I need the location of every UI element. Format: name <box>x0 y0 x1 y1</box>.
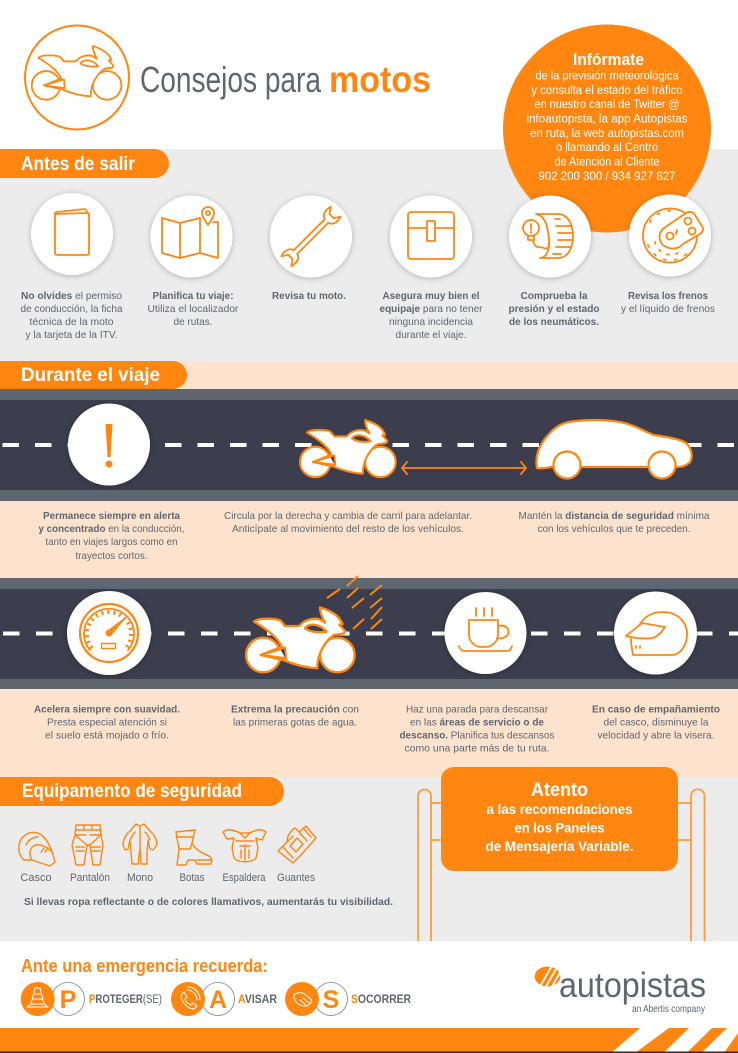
text: carril: Circula por la derecha y cambia de carril para adelantar. <box>224 510 472 522</box>
text: distancia <box>518 510 710 535</box>
sign: Paneles de Mensajería Variable: Atento <box>531 780 588 801</box>
panel: documentos: de conducción, la ficha <box>20 303 123 315</box>
text: alerta: trayectos cortos. <box>76 550 148 562</box>
text: empañamiento: En caso de empañamiento <box>592 704 720 716</box>
text: alerta: y concentrado en la conducción, <box>38 523 184 535</box>
icon: botas <box>176 830 212 865</box>
panel: equipaje: ninguna incidencia <box>389 316 473 328</box>
heading: Durante el viaje: Durante el viaje <box>21 365 160 386</box>
heading: Antes de salir: Antes de salir <box>21 154 136 175</box>
icon: brake disc <box>643 208 703 262</box>
title: motos <box>329 59 431 100</box>
text: precaución: las primeras gotas de agua. <box>233 716 357 728</box>
text: distancia: Mantén la distancia de seguridad mínima <box>518 510 710 522</box>
panel: documentos: técnica de la moto <box>30 316 114 328</box>
panel: frenos: y el líquido de frenos <box>621 303 715 315</box>
text: visibility tip: Si llevas ropa reflectante o de colores llamativos, aumentarás tu visibilidad. <box>24 896 393 908</box>
icon: tyre gauge <box>523 214 573 258</box>
text: alerta <box>38 510 184 562</box>
text: acelera: Acelera siempre con suavidad. <box>34 704 180 716</box>
icon: pantalón <box>72 825 103 865</box>
panel: revisa moto <box>270 196 352 302</box>
callout: Infórmate: de la previsión meteorológica <box>536 70 679 82</box>
sign: Paneles de Mensajería Variable: de Mensajería Variable. <box>486 838 634 854</box>
heading: Equipamento de seguridad: Equipamento de seguridad <box>22 781 242 802</box>
panel: revisa moto: Revisa tu moto. <box>272 290 346 302</box>
icon: motorcycle in rain <box>246 607 355 672</box>
step: avisar <box>171 982 278 1016</box>
road: second <box>0 578 738 689</box>
text: Espaldera: Espaldera <box>222 872 266 884</box>
callout: Infórmate: o llamando al Centro <box>556 142 658 154</box>
text: acelera: Presta especial atención si <box>47 716 167 728</box>
logo: autopistas: autopistas <box>559 966 706 1005</box>
panel: frenos: Revisa los frenos <box>628 290 708 302</box>
panel: neumáticos <box>508 196 600 328</box>
panel: planifica: Planifica tu viaje: <box>152 290 234 302</box>
title: Consejos para <box>140 59 322 100</box>
step: proteger: P <box>60 986 76 1014</box>
text: empañamiento <box>592 704 720 742</box>
heading: emergency: Ante una emergencia recuerda: <box>21 956 268 976</box>
road: first <box>0 389 738 501</box>
text: carril <box>224 510 472 535</box>
panel: planifica: Utiliza el localizador <box>148 303 239 315</box>
panel: equipaje: Asegura muy bien el <box>382 290 480 302</box>
text: parada: Haz una parada para descansar <box>406 704 548 716</box>
text: Pantalón: Pantalón <box>70 872 110 884</box>
text: precaución <box>231 704 359 728</box>
sign: Paneles de Mensajería Variable: a las recomendaciones <box>486 801 633 817</box>
icon: car <box>536 420 692 478</box>
step: proteger: PROTEGER(SE) <box>89 994 162 1006</box>
panel: equipment <box>19 824 393 908</box>
text: parada: descanso. Planifica tus descansos <box>400 730 554 742</box>
panel: equipaje <box>380 196 483 341</box>
icon: casco <box>19 832 55 866</box>
step: avisar: A <box>209 986 227 1014</box>
panel: neumáticos: presión y el estado <box>508 303 600 315</box>
footer bar <box>0 1028 738 1053</box>
icon: rain drops <box>327 576 382 629</box>
callout: Infórmate: infoautopista, la app Autopistas <box>526 114 688 126</box>
step: proteger <box>21 982 162 1016</box>
panel: neumáticos: de los neumáticos. <box>509 316 599 328</box>
logo: autopistas <box>534 964 706 1015</box>
step: socorrer: S <box>323 986 339 1014</box>
panel: planifica <box>148 196 239 328</box>
panel: documentos: y la tarjeta de la ITV. <box>26 329 118 341</box>
panel: neumáticos: Comprueba la <box>520 290 588 302</box>
text: precaución: Extrema la precaución con <box>231 704 359 716</box>
panel: equipaje: equipaje para no tener <box>380 303 483 315</box>
callout: Infórmate: 902 200 300 / 934 927 827 <box>538 171 676 183</box>
icon: espaldera <box>223 830 266 862</box>
icon: wrench <box>281 206 341 267</box>
arrow: safety distance <box>402 462 526 474</box>
text: acelera: el suelo está mojado o frío. <box>45 730 169 742</box>
text: alerta: Permanece siempre en alerta <box>43 510 180 522</box>
text: carril: Anticípate al movimiento del resto de los vehículos. <box>232 523 464 535</box>
text: Guantes: Guantes <box>277 872 315 884</box>
text: empañamiento: del casco, disminuye la <box>604 716 709 728</box>
icon: luggage box <box>408 212 454 259</box>
heading: Durante el viaje <box>0 361 187 389</box>
step: socorrer <box>285 982 412 1016</box>
step: socorrer: SOCORRER <box>351 994 412 1006</box>
callout: Infórmate: en ruta, la web autopistas.com <box>530 128 684 140</box>
icon: coffee cup <box>444 592 526 674</box>
text: Mono: Mono <box>127 872 153 884</box>
panel: documentos <box>20 193 123 341</box>
icon: motorcycle logo <box>25 26 129 130</box>
text: acelera <box>34 704 180 742</box>
icon: map with pin <box>162 207 218 258</box>
icon: documents <box>55 209 89 255</box>
callout: Infórmate <box>503 24 711 232</box>
icon: guantes <box>278 826 316 863</box>
panel: frenos <box>621 194 715 315</box>
heading: Equipamento de seguridad <box>0 777 284 806</box>
callout: Infórmate: en nuestro canal de Twitter @ <box>534 99 680 111</box>
sign: Paneles de Mensajería Variable: en los Paneles <box>514 820 605 836</box>
text: Botas: Botas <box>180 872 205 884</box>
text: parada <box>400 704 554 754</box>
icon: speedometer <box>67 591 151 675</box>
icon: helmet <box>614 592 697 674</box>
panel: planifica: de rutas. <box>174 316 212 328</box>
text: parada: en las áreas de servicio o de <box>410 716 544 728</box>
logo: autopistas: an Abertis company <box>632 1004 705 1015</box>
sign: Paneles de Mensajería Variable <box>418 767 704 941</box>
icon: white motorcycle <box>300 420 396 477</box>
callout: Infórmate: y consulta el estado del tráfico <box>532 85 682 97</box>
heading: Antes de salir <box>0 149 169 178</box>
icon: mono <box>123 824 157 864</box>
text: empañamiento: velocidad y abre la visera. <box>598 730 714 742</box>
panel: documentos: No olvides el permiso <box>21 290 122 302</box>
text: parada: como una parte más de tu ruta. <box>404 742 550 754</box>
callout: Infórmate: Infórmate <box>573 50 644 69</box>
text: Casco: Casco <box>20 872 52 884</box>
icon: alert circle <box>68 404 150 486</box>
text: distancia: con los vehículos que te preceden. <box>538 523 690 535</box>
text: alerta: tanto en viajes largos como en <box>46 536 178 548</box>
step: avisar: AVISAR <box>238 994 278 1006</box>
panel: equipaje: durante el viaje. <box>396 329 466 341</box>
callout: Infórmate: de Atención al Cliente <box>554 156 660 168</box>
